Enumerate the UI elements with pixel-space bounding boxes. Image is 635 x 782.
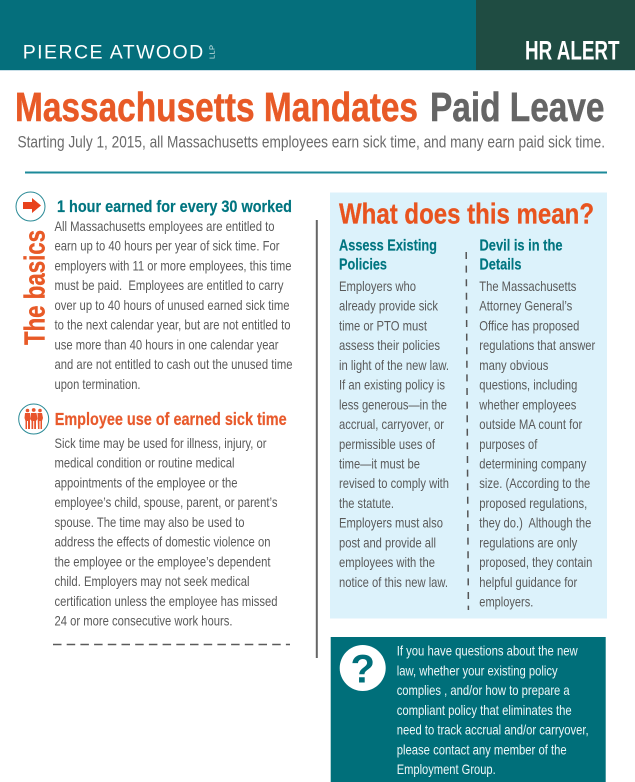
column: devil is in the details [479, 238, 596, 609]
text block: assess policies: notice of this new law. [339, 574, 448, 590]
text block: accrual rules: must be paid. Employees are entitled to carry [54, 277, 284, 293]
text block: assess policies: Employers must also [339, 515, 443, 531]
text block: assess policies: employees with the [339, 554, 435, 570]
subheading: assess existing policies: Policies [339, 257, 387, 274]
text block: proposed regulations: proposed regulations, [479, 495, 587, 511]
text block: proposed regulations: questions, including [479, 377, 577, 393]
text block: proposed regulations: regulations are only [479, 534, 577, 550]
icon: people in circle [19, 404, 49, 434]
text block: permitted uses: employee’s child, spouse, parent, or parent’s [54, 494, 278, 510]
text block: proposed regulations: Office has proposed [479, 317, 579, 333]
text block: assess policies: post and provide all [339, 534, 436, 550]
right header block [476, 0, 635, 70]
text block: contact: complies , and/or how to prepare a [397, 682, 570, 698]
text block: accrual rules: employers with 11 or more employees, this time [54, 257, 292, 273]
text block: proposed regulations: Attorney General’s [479, 298, 572, 314]
subheading: assess existing policies: Assess Existing [339, 238, 437, 255]
heading: 1 hour earned: 1 hour earned for every 30 worked [57, 197, 292, 216]
text block: contact: need to track accrual and/or carryover, [397, 722, 589, 738]
column: assess existing policies [339, 238, 449, 590]
subheading: devil is in the details: Devil is in the [480, 238, 563, 255]
text block: proposed regulations: purposes of [479, 436, 537, 452]
text block: assess policies: in light of the new law. [339, 357, 449, 373]
icon: question mark: ? [350, 648, 375, 692]
text block: permitted uses [54, 435, 278, 628]
icon: question mark [340, 645, 386, 692]
text block: permitted uses: 24 or more consecutive work hours. [54, 612, 232, 628]
text block: permitted uses: certification unless the employee has missed [54, 593, 278, 609]
section: 1 hour earned [54, 197, 293, 392]
heading: what does this mean: What does this mean? [339, 198, 594, 230]
subheading: devil is in the details [480, 238, 563, 274]
section: employee use [54, 409, 287, 628]
logo: Pierce Atwood: LLP [208, 45, 216, 59]
text block: contact: compliant policy that eliminates the [397, 702, 572, 718]
text block: permitted uses: the employee or the employee’s dependent [54, 553, 271, 569]
text block: contact: please contact any member of the [397, 741, 567, 757]
text block: assess policies: If an existing policy is [339, 377, 445, 393]
text block: accrual rules [54, 218, 293, 392]
text block: proposed regulations: employers. [479, 594, 533, 610]
vertical heading: The basics: The basics [20, 230, 52, 345]
panel: what does this mean [330, 192, 607, 618]
text block: assess policies: revised to comply with [339, 475, 449, 491]
text block: assess policies [339, 278, 449, 590]
text block: contact: law, whether your existing policy [397, 662, 558, 678]
text block: permitted uses: Sick time may be used for illness, injury, or [54, 435, 267, 451]
panel: questions callout [331, 637, 606, 782]
logo: Pierce Atwood: PIERCE ATWOOD [23, 41, 203, 63]
text block: assess policies: Employers who [339, 278, 416, 294]
text block: proposed regulations: many obvious [479, 357, 548, 373]
text block: contact [397, 643, 589, 777]
text block: accrual rules: use more than 40 hours in one calendar year [54, 336, 279, 352]
text block: proposed regulations: The Massachusetts [479, 278, 576, 294]
text block: contact: If you have questions about the new [397, 643, 578, 659]
text block: accrual rules: and are not entitled to cash out the unused time [54, 356, 293, 372]
text block: assess policies: time or PTO must [339, 317, 427, 333]
text block: accrual rules: upon termination. [54, 376, 140, 392]
text block: proposed regulations: outside MA count for [479, 416, 583, 432]
text block: accrual rules: over up to 40 hours of unused earned sick time [54, 297, 290, 313]
subheading: assess existing policies [339, 238, 437, 274]
text block: permitted uses: medical condition or routine medical [54, 455, 234, 471]
text block: accrual rules: All Massachusetts employees are entitled to [54, 218, 275, 234]
text block: assess policies: already provide sick [339, 298, 439, 314]
text block: permitted uses: spouse. The time may also be used to [54, 514, 245, 530]
text block: assess policies: accrual, carryover, or [339, 416, 444, 432]
text block: proposed regulations: determining company [479, 456, 586, 472]
text block: accrual rules: to the next calendar year, but are not entitled to [54, 317, 291, 333]
text block: proposed regulations: helpful guidance for [479, 574, 578, 590]
text block: proposed regulations: regulations that answer [479, 337, 596, 353]
subheading: devil is in the details: Details [480, 257, 522, 274]
heading: employee use of earned sick time: Employee use of earned sick time [55, 409, 287, 429]
text block: proposed regulations [479, 278, 596, 610]
text block: accrual rules: earn up to 40 hours per year of sick time. For [54, 238, 280, 254]
text block: permitted uses: appointments of the employee or the [54, 474, 238, 490]
text block: assess policies: permissible uses of [339, 436, 435, 452]
icon: arrow in circle [16, 192, 45, 221]
title: Massachusetts Mandates [15, 84, 418, 130]
text block: proposed regulations: whether employees [479, 396, 576, 412]
text block: proposed regulations: they do.) Although the [479, 515, 591, 531]
header band [0, 0, 635, 71]
text block: assess policies: less generous—in the [339, 396, 447, 412]
text block: proposed regulations: size. (According to the [479, 475, 590, 491]
text block: assess policies: the statute. [339, 495, 394, 511]
text block: assess policies: assess their policies [339, 337, 440, 353]
text block: assess policies: time—it must be [339, 456, 420, 472]
text block: permitted uses: address the effects of domestic violence on [54, 534, 270, 550]
text block: permitted uses: child. Employers may not seek medical [54, 573, 250, 589]
text block: contact: Employment Group. [397, 761, 496, 777]
text block: proposed regulations: proposed, they contain [479, 554, 592, 570]
